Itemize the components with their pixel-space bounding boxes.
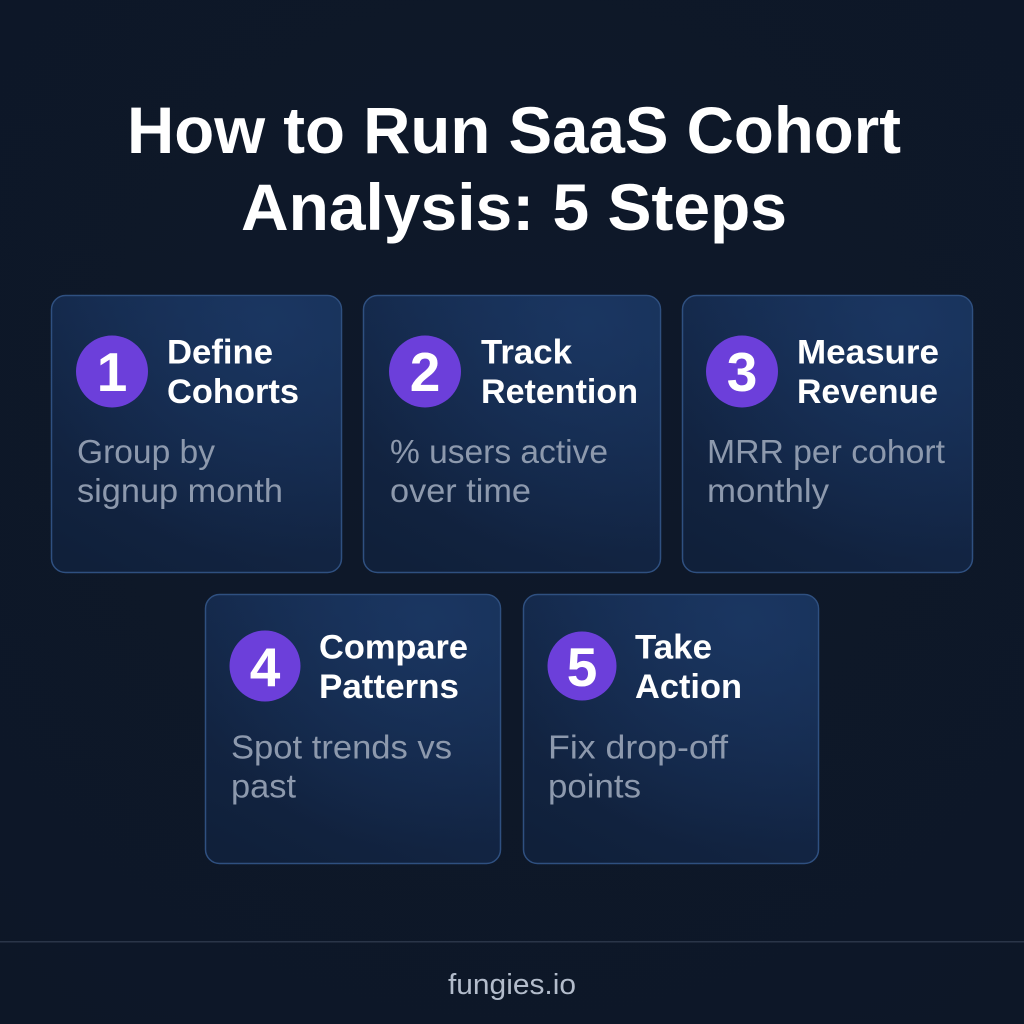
step 2 heading: Track <box>481 334 572 372</box>
footer brand: fungies.io <box>448 969 576 1001</box>
badge: step 5: 5 <box>567 636 597 698</box>
title: How to Run SaaS Cohort <box>127 93 901 167</box>
step 2 description: over time <box>390 472 531 509</box>
badge: step 3: 3 <box>727 341 757 403</box>
badge: step 3 <box>706 336 778 408</box>
step 5 heading: Take <box>635 628 712 666</box>
step 1 description <box>77 433 283 509</box>
step 4 description <box>231 728 452 804</box>
step 3 description: monthly <box>707 472 830 509</box>
step 2 description: % users active <box>390 433 608 470</box>
step 4 heading: Compare <box>319 628 468 666</box>
badge: step 1: 1 <box>97 341 127 403</box>
step 3 heading: Measure <box>797 334 939 372</box>
badge: step 2 <box>389 336 461 408</box>
step 1 heading: Define <box>167 334 273 372</box>
step 1 heading <box>167 334 299 411</box>
badge: step 5 <box>548 632 616 700</box>
panel: step 5 take action <box>524 594 818 864</box>
step 3 heading <box>797 334 939 411</box>
step 4 heading: Patterns <box>319 668 459 706</box>
panel: step 1 define cohorts <box>52 296 342 572</box>
step 3 description <box>707 433 945 509</box>
step 1 heading: Cohorts <box>167 373 299 411</box>
badge: step 1 <box>76 336 148 408</box>
step 3 description: MRR per cohort <box>707 433 945 470</box>
panel: step 2 track retention <box>364 296 660 572</box>
panel: step 4 compare patterns <box>206 594 500 864</box>
step 2 heading <box>481 334 638 411</box>
badge: step 2: 2 <box>410 341 440 403</box>
step 2 heading: Retention <box>481 373 638 411</box>
step 4 description: past <box>231 768 296 804</box>
step 2 description <box>390 433 608 509</box>
step 1 description: signup month <box>77 472 283 509</box>
step 5 description <box>548 728 729 804</box>
step 5 description: Fix drop-off <box>548 728 729 766</box>
step 1 description: Group by <box>77 433 215 470</box>
badge: step 4: 4 <box>250 636 281 698</box>
step 4 heading <box>319 628 468 706</box>
title <box>127 93 901 244</box>
panel: step 3 measure revenue <box>682 296 972 572</box>
step 5 heading <box>635 628 742 706</box>
step 5 description: points <box>548 768 641 804</box>
badge: step 4 <box>230 630 300 702</box>
title: Analysis: 5 Steps <box>241 170 787 244</box>
step 3 heading: Revenue <box>797 373 938 411</box>
step 5 heading: Action <box>635 668 742 706</box>
step 4 description: Spot trends vs <box>231 728 452 766</box>
